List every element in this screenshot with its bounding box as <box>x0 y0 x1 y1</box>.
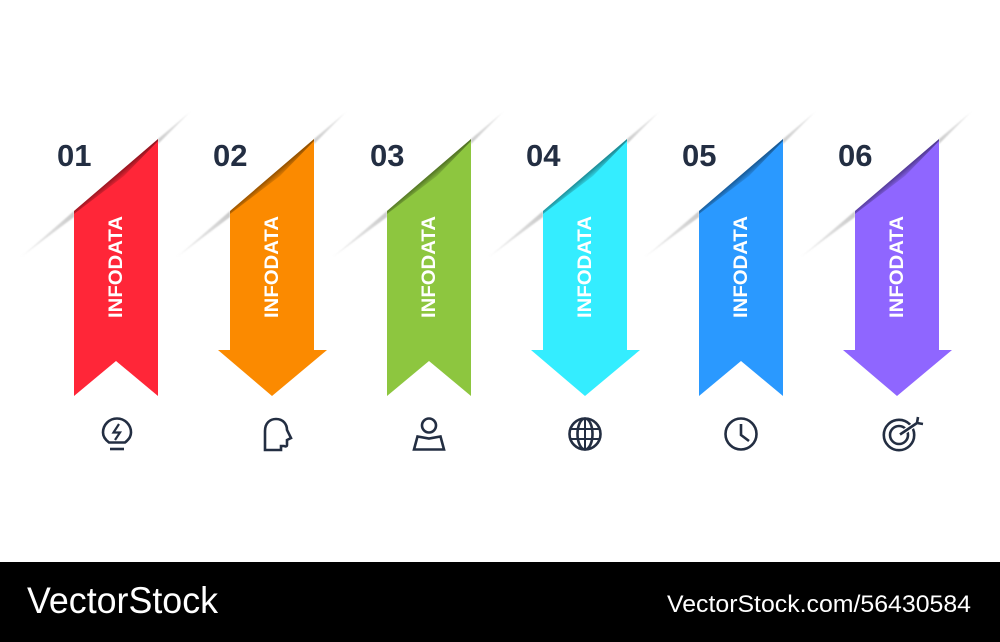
paper fold shadow <box>177 112 346 257</box>
paper fold shadow <box>489 112 659 257</box>
red ribbon <box>74 139 158 396</box>
label: INFODATA <box>886 216 908 318</box>
green ribbon <box>387 139 471 396</box>
orange arrow <box>218 139 327 396</box>
paper fold shadow <box>801 112 971 257</box>
cyan arrow <box>531 139 640 396</box>
icon: head <box>265 419 291 450</box>
column 6: purple arrow <box>801 112 971 450</box>
column 3: green ribbon <box>333 112 503 450</box>
icon: person on map <box>414 418 444 450</box>
label: INFODATA <box>418 216 440 318</box>
icon: light bulb <box>103 419 131 449</box>
icon: globe <box>570 418 600 450</box>
icon: target with arrow <box>884 417 923 450</box>
purple arrow <box>843 139 952 396</box>
column 1: red ribbon <box>21 112 190 449</box>
cut edge shadow <box>387 139 471 214</box>
cut edge shadow <box>855 139 939 214</box>
icon: clock <box>726 418 756 450</box>
number 01: 01 <box>57 138 91 173</box>
column 4: cyan arrow <box>489 112 659 450</box>
column 2: orange arrow <box>177 112 346 450</box>
blue ribbon <box>699 139 783 396</box>
paper fold shadow <box>333 112 503 257</box>
label: INFODATA <box>574 216 596 318</box>
cut edge shadow <box>543 139 627 214</box>
paper fold shadow <box>21 112 190 257</box>
cut edge shadow <box>230 139 314 214</box>
cut edge shadow <box>74 139 158 214</box>
label: INFODATA <box>730 216 752 318</box>
footer bar <box>0 562 1000 642</box>
image url: VectorStock.com/56430584 <box>667 591 971 618</box>
number 05: 05 <box>682 138 716 173</box>
brand name: VectorStock <box>27 580 218 621</box>
label: INFODATA <box>261 216 283 318</box>
paper fold shadow <box>645 112 815 257</box>
column 5: blue ribbon <box>645 112 815 450</box>
number 03: 03 <box>370 138 404 173</box>
number 04: 04 <box>526 138 561 173</box>
number 06: 06 <box>838 138 872 173</box>
number 02: 02 <box>213 138 247 173</box>
label: INFODATA <box>105 216 127 318</box>
cut edge shadow <box>699 139 783 214</box>
